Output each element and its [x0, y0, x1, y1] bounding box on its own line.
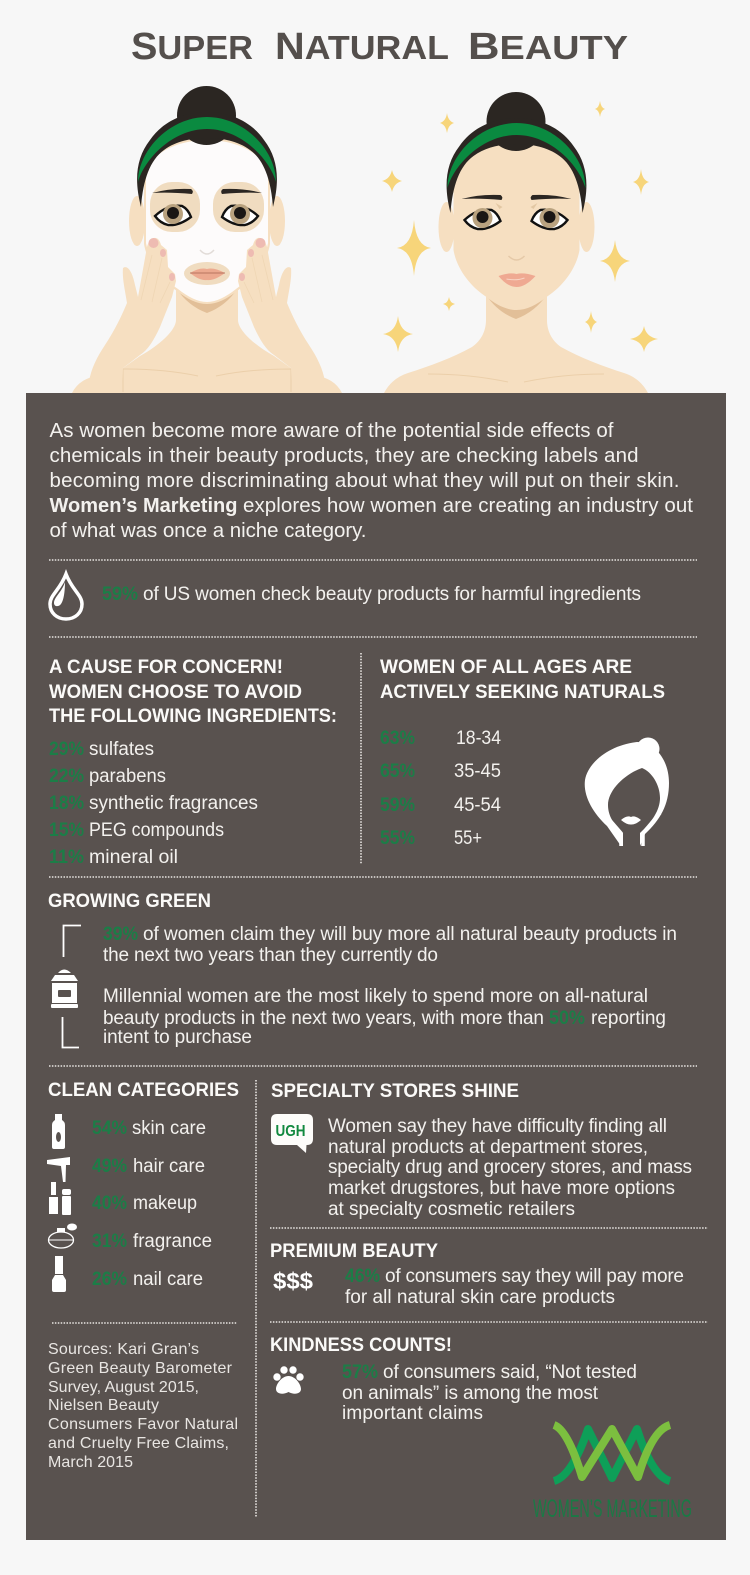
- stat: 59% check for harmful ingredients: [50, 574, 641, 619]
- title: BEAUTY: [468, 26, 628, 68]
- heading: growing green: GROWING GREEN: [48, 891, 211, 912]
- ingredient list: [49, 739, 258, 868]
- category list: 49%: [92, 1156, 127, 1177]
- kindness counts text: on animals” is among the most: [342, 1383, 599, 1404]
- sources text: Consumers Favor Natural: [48, 1416, 238, 1433]
- intro text: becoming more discriminating about what they will put on their skin.: [50, 469, 680, 492]
- icon: skin care bottle: [52, 1114, 65, 1149]
- age group list: 63%: [380, 728, 415, 749]
- ingredient list: synthetic fragrances: [89, 793, 258, 814]
- kindness counts text: 57%: [342, 1362, 378, 1383]
- age group list: 35-45: [454, 761, 501, 782]
- age group list: 45-54: [454, 795, 501, 816]
- icon: mascara: [49, 1182, 71, 1215]
- specialty stores text: Women say they have difficulty finding all: [328, 1116, 667, 1137]
- intro text: chemicals in their beauty products, they are checking labels and: [50, 444, 638, 467]
- ingredient list: parabens: [89, 766, 166, 787]
- growing green text: 39%: [103, 924, 138, 945]
- heading: women of all ages: WOMEN OF ALL AGES ARE: [380, 657, 632, 678]
- panel: ingredients to avoid: [49, 657, 337, 868]
- age group list: 18-34: [456, 728, 501, 749]
- category list: 26%: [92, 1269, 127, 1290]
- icon: woman head: [585, 738, 669, 848]
- sources text: Green Beauty Barometer: [48, 1360, 233, 1377]
- title: SUPER: [131, 26, 253, 68]
- panel: kindness counts: [270, 1335, 637, 1424]
- stat: 59% check for harmful ingredients: of US women check beauty products for harmful ingredients: [143, 584, 641, 605]
- icon: gold sparkles: [382, 101, 658, 352]
- intro text: As women become more aware of the potential side effects of: [50, 419, 614, 442]
- specialty stores text: at specialty cosmetic retailers: [328, 1199, 575, 1220]
- sources text: March 2015: [48, 1454, 133, 1471]
- category list: [92, 1118, 212, 1290]
- illustration: woman with clear skin: [384, 92, 648, 393]
- icon: cream jar with brackets: [51, 926, 81, 1048]
- sources text: [48, 1341, 238, 1471]
- icon: nail polish: [52, 1256, 66, 1292]
- heading: clean categories: CLEAN CATEGORIES: [48, 1080, 239, 1101]
- ingredient list: 29%: [49, 739, 84, 760]
- intro text: explores how women are creating an industry out: [243, 494, 693, 517]
- premium beauty text: for all natural skin care products: [345, 1287, 615, 1308]
- icon: water drop: [50, 574, 82, 619]
- growing green text: intent to purchase: [103, 1027, 252, 1048]
- growing green text: Millennial women are the most likely to spend more on all-natural: [103, 986, 648, 1007]
- icon: dollar signs: $$$: [273, 1268, 313, 1294]
- panel: specialty stores shine: [271, 1081, 692, 1220]
- category list: nail care: [133, 1269, 203, 1290]
- age group list: [380, 728, 501, 849]
- category list: 54%: [92, 1118, 127, 1139]
- specialty stores text: specialty drug and grocery stores, and mass: [328, 1157, 692, 1178]
- heading: premium beauty: PREMIUM BEAUTY: [270, 1241, 438, 1262]
- growing green text: beauty products in the next two years, with more than: [103, 1008, 544, 1029]
- icon: hair dryer: [47, 1157, 70, 1182]
- specialty stores text: market drugstores, but have more options: [328, 1178, 675, 1199]
- specialty stores text: natural products at department stores,: [328, 1137, 648, 1158]
- growing green text: [103, 924, 677, 1048]
- premium beauty text: [345, 1266, 684, 1308]
- ingredient list: mineral oil: [89, 847, 178, 868]
- growing green text: of women claim they will buy more all natural beauty products in: [143, 924, 677, 945]
- category list: makeup: [133, 1193, 197, 1214]
- heading: a cause for concern: A CAUSE FOR CONCERN!: [49, 657, 283, 678]
- sources text: Survey, August 2015,: [48, 1379, 199, 1396]
- heading: specialty stores shine: SPECIALTY STORES SHINE: [271, 1081, 519, 1102]
- ingredient list: 22%: [49, 766, 84, 787]
- premium beauty text: 46%: [345, 1266, 380, 1287]
- icon: paw print: [273, 1366, 304, 1394]
- panel: women of all ages: [380, 657, 669, 849]
- age group list: 59%: [380, 795, 415, 816]
- heading: women of all ages: ACTIVELY SEEKING NATURALS: [380, 682, 665, 703]
- heading: a cause for concern: [49, 657, 337, 727]
- age group list: 55%: [380, 828, 415, 849]
- heading: a cause for concern: WOMEN CHOOSE TO AVOID: [49, 682, 302, 703]
- kindness counts text: of consumers said, “Not tested: [383, 1362, 637, 1383]
- ingredient list: sulfates: [89, 739, 154, 760]
- stat: 59% check for harmful ingredients: 59%: [102, 584, 138, 605]
- logo: Women's Marketing: [533, 1425, 692, 1523]
- specialty stores text: [328, 1116, 692, 1220]
- panel: premium beauty: [270, 1241, 684, 1308]
- growing green text: 50%: [549, 1008, 585, 1029]
- panel: dark background: [26, 393, 726, 1540]
- ingredient list: 18%: [49, 793, 84, 814]
- heading: women of all ages: [380, 657, 665, 703]
- kindness counts text: [342, 1362, 637, 1424]
- sources text: Sources: Kari Gran’s: [48, 1341, 199, 1358]
- heading: kindness counts: KINDNESS COUNTS!: [270, 1335, 452, 1356]
- ingredient list: 15%: [49, 820, 84, 841]
- intro text: of what was once a niche category.: [50, 519, 366, 542]
- sources text: Nielsen Beauty: [48, 1397, 159, 1414]
- icon: perfume bottle: [48, 1224, 77, 1248]
- kindness counts text: important claims: [342, 1403, 483, 1424]
- ingredient list: 11%: [49, 847, 84, 868]
- icon: UGH speech bubble: [271, 1114, 313, 1153]
- icon: UGH speech bubble: UGH: [276, 1123, 306, 1140]
- age group list: 65%: [380, 761, 415, 782]
- category list: fragrance: [133, 1231, 212, 1252]
- category list: skin care: [132, 1118, 206, 1139]
- heading: a cause for concern: THE FOLLOWING INGREDIENTS:: [49, 706, 337, 727]
- premium beauty text: of consumers say they will pay more: [385, 1266, 684, 1287]
- category list: 40%: [92, 1193, 127, 1214]
- illustration: woman applying face mask: [72, 86, 342, 393]
- growing green text: reporting: [591, 1008, 666, 1029]
- intro text: [50, 419, 693, 542]
- intro text: Women’s Marketing: [50, 494, 238, 517]
- ingredient list: PEG compounds: [89, 820, 224, 841]
- title: [131, 26, 628, 68]
- title: NATURAL: [275, 26, 449, 68]
- panel: growing green: [48, 891, 677, 1048]
- category list: 31%: [92, 1231, 127, 1252]
- category list: hair care: [133, 1156, 205, 1177]
- sources text: and Cruelty Free Claims,: [48, 1435, 229, 1452]
- growing green text: the next two years than they currently do: [103, 945, 438, 966]
- panel: clean categories: [47, 1080, 239, 1292]
- age group list: 55+: [454, 828, 482, 849]
